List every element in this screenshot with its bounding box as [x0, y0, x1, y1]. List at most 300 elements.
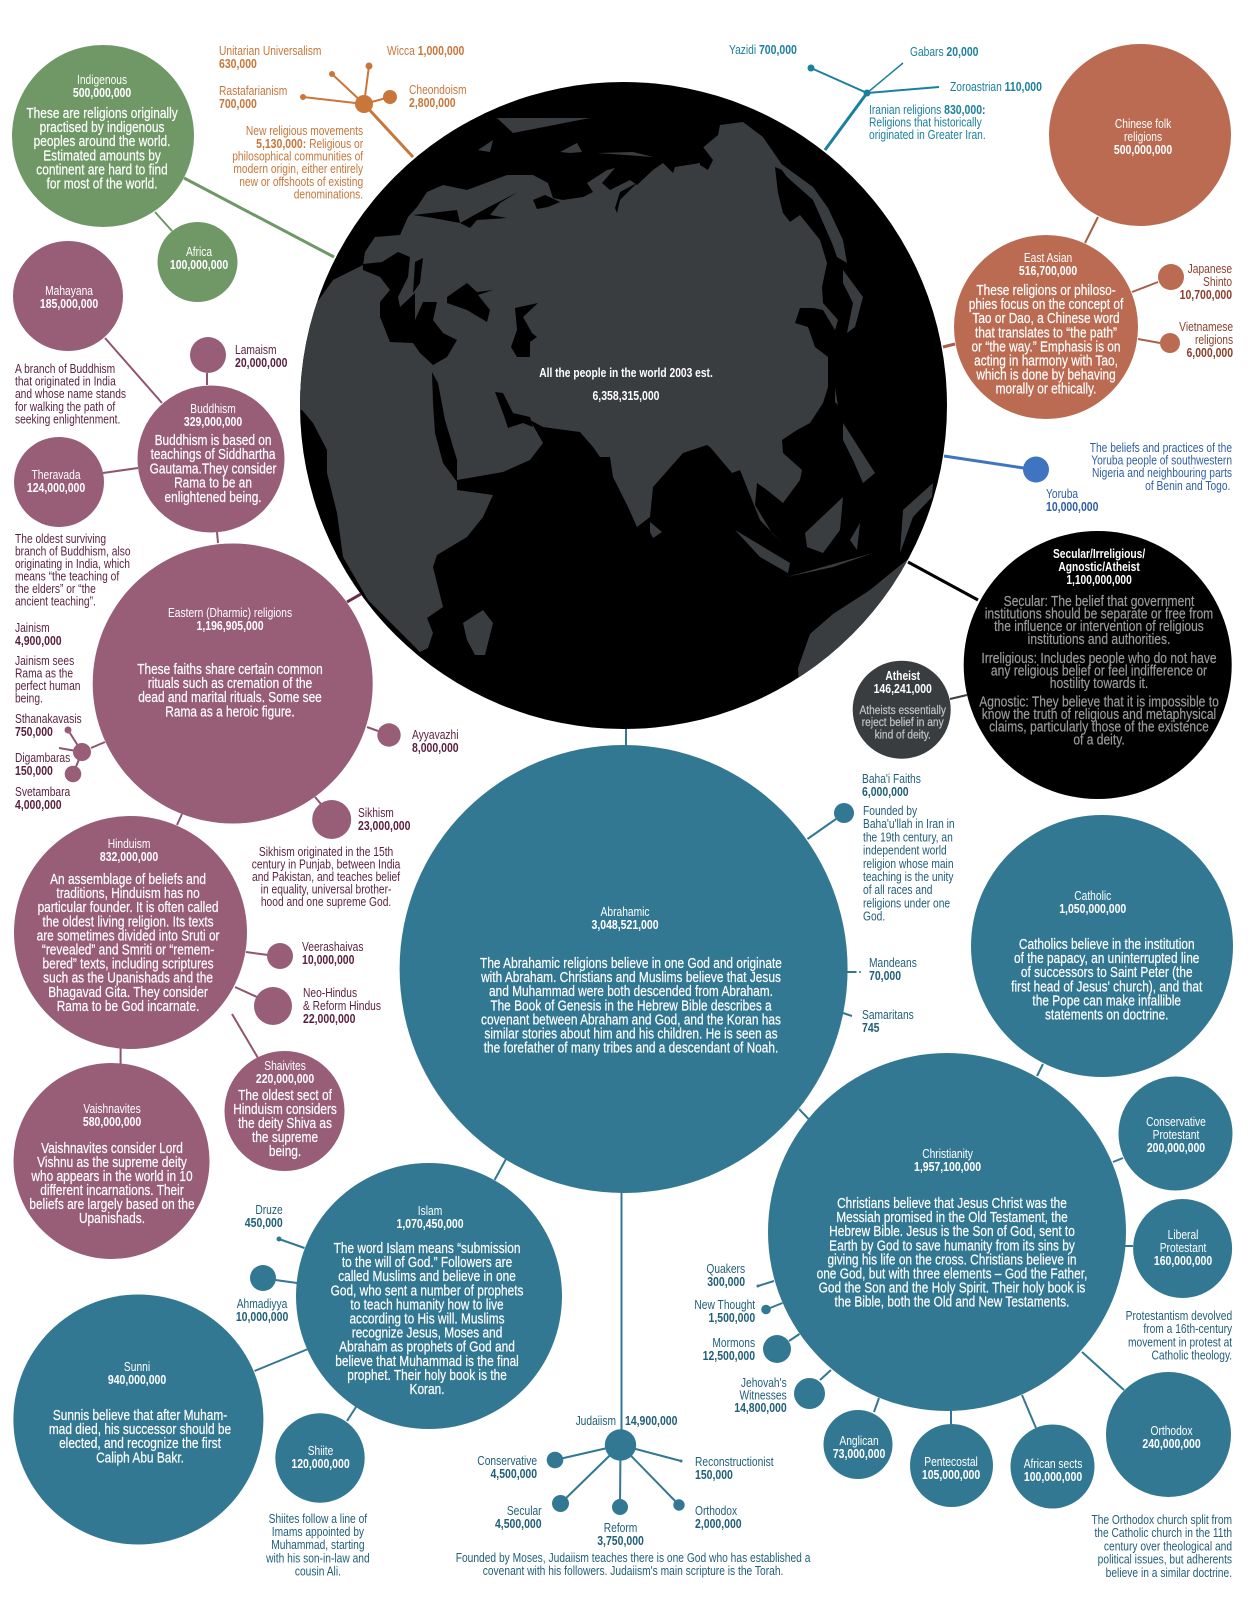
panel: Abrahamic: Abrahamic — [601, 906, 650, 919]
Liberal Protestant: Protestantism devolved — [1126, 1310, 1232, 1323]
panel: Islam — [13, 1163, 562, 1579]
Jainism cluster: 750,000 — [15, 725, 53, 739]
Liberal Protestant: 160,000,000 — [1154, 1254, 1213, 1268]
Liberal Protestant — [1126, 1199, 1233, 1363]
panel: Iranian religions: Religions that historically — [869, 117, 982, 130]
Japanese Shinto: Japanese — [1188, 263, 1232, 276]
Mormons: Mormons — [712, 1337, 755, 1350]
Druze — [245, 1204, 283, 1242]
Sikhism: century in Punjab, between India — [252, 859, 401, 872]
panel: new religious movements: denominations. — [294, 189, 363, 202]
Atheist circle: Atheists essentially — [860, 704, 946, 717]
Mandeans: Mandeans — [869, 957, 917, 970]
Quakers: Quakers — [706, 1263, 745, 1276]
Vaishnavites: Vaishnavites consider Lord — [41, 1140, 183, 1156]
panel: Indigenous: These are religions originally — [26, 105, 178, 121]
Orthodox: century over theological and — [1104, 1541, 1232, 1554]
Theravada: Theravada — [32, 469, 81, 482]
panel: Christianity: 1,957,100,000 — [914, 1160, 982, 1174]
panel: Secular/Irreligious/Agnostic/Atheist: Secular: The belief that government — [1004, 593, 1194, 609]
Vaishnavites — [14, 1063, 210, 1259]
panel: Yoruba: Yoruba people of southwestern — [1091, 455, 1232, 468]
panel: Eastern (Dharmic) religions: dead and marital rituals. Some see — [138, 689, 322, 705]
Theravada: branch of Buddhism, also — [15, 546, 131, 559]
Orthodox: Orthodox — [1150, 1425, 1193, 1438]
panel: Catholic: statements on doctrine. — [1045, 1006, 1168, 1023]
Quakers: 300,000 — [707, 1275, 746, 1289]
panel: Christianity: Christians believe that Jesus Christ was the — [837, 1195, 1067, 1211]
panel: Christianity: Christianity — [922, 1148, 973, 1161]
panel: Secular/Irreligious/Agnostic/Atheist: any religious belief or feel indifference or — [991, 662, 1208, 679]
Druze: 450,000 — [245, 1216, 283, 1230]
Liberal Protestant: Catholic theology. — [1151, 1350, 1232, 1363]
Ahmadiyya: 10,000,000 — [236, 1310, 289, 1324]
Jainism cluster: 150,000 — [15, 764, 53, 778]
Liberal Protestant: Liberal — [1168, 1229, 1198, 1242]
panel: Christianity: one God, but with three elements – God the Father, — [817, 1265, 1087, 1282]
Shiite: Shiites follow a line of — [269, 1513, 367, 1526]
panel: Hinduism: traditions, Hinduism has no — [56, 885, 200, 901]
Jainism cluster: Rama as the — [15, 668, 73, 681]
panel: East Asian: which is done by behaving — [975, 366, 1116, 383]
panel: Hinduism: particular founder. It is often called — [38, 899, 219, 915]
panel: Secular/Irreligious/Agnostic/Atheist — [853, 531, 1232, 799]
Japanese Shinto — [1158, 263, 1233, 302]
panel: Buddhism: Buddhism is based on — [155, 432, 272, 448]
Neo-Hindus: & Reform Hindus — [303, 1000, 381, 1013]
panel: Eastern (Dharmic) religions: Eastern (Dharmic) religions — [168, 607, 292, 620]
panel: Hinduism: An assemblage of beliefs and — [50, 871, 206, 887]
panel: new religious movements: 700,000 — [219, 97, 257, 111]
panel: Judaism: 2,000,000 — [695, 1517, 742, 1531]
Theravada: 124,000,000 — [27, 481, 86, 495]
panel: new religious movements: Rastafarianism — [219, 85, 287, 98]
panel: Abrahamic: The Abrahamic religions believe in one God and originate — [480, 955, 782, 971]
Baha'i Faiths: Baha'u'llah in Iran in — [863, 818, 955, 831]
panel: Buddhism: 329,000,000 — [184, 415, 243, 429]
panel: Christianity — [694, 1053, 1233, 1580]
panel: Hinduism: Bhagavad Gita. They consider — [48, 984, 208, 1000]
panel: Yoruba: 10,000,000 — [1046, 500, 1099, 514]
Jainism cluster: perfect human — [15, 680, 80, 693]
panel: East Asian: Tao or Dao, a Chinese word — [972, 310, 1120, 326]
panel: Abrahamic: similar stories about him and his children. He is seen as — [484, 1025, 778, 1042]
panel: Catholic: first head of Jesus' church), and that — [1011, 978, 1203, 995]
panel: Secular/Irreligious/Agnostic/Atheist: of a deity. — [1073, 731, 1125, 748]
panel: new religious movements: 5,130,000: Religious or — [256, 137, 363, 151]
panel: Catholic: of successors to Saint Peter (the — [1021, 964, 1193, 980]
New Thought: New Thought — [694, 1299, 755, 1312]
panel: Abrahamic: the forefather of many tribes and a descendant of Noah. — [484, 1039, 778, 1056]
panel: Buddhism — [13, 241, 288, 609]
Vaishnavites: beliefs are largely based on the — [29, 1196, 195, 1212]
Jainism cluster: Sthanakavasis — [15, 713, 82, 726]
panel: Eastern (Dharmic) religions: 1,196,905,000 — [197, 619, 264, 633]
New Thought: 1,500,000 — [709, 1311, 756, 1325]
panel: Iranian religions — [729, 43, 1042, 150]
panel: new religious movements: new or offshoots of existing — [239, 176, 363, 189]
Jainism cluster: Jainism — [15, 622, 50, 635]
Veerashaivas — [267, 941, 364, 969]
Pentecostal — [910, 1424, 993, 1507]
panel: Eastern (Dharmic) religions: rituals such as cremation of the — [148, 675, 312, 691]
Vaishnavites: Upanishads. — [79, 1210, 145, 1226]
New Thought — [694, 1299, 771, 1325]
panel: Judaism: Founded by Moses, Judaiism teaches there is one God who has established a — [456, 1552, 810, 1565]
panel: Judaism — [456, 1190, 811, 1578]
panel: Abrahamic: covenant between Abraham and God, and the Koran has — [481, 1011, 781, 1028]
panel: Islam: to teach humanity how to live — [350, 1296, 504, 1313]
panel: Eastern (Dharmic) religions: These faiths share certain common — [137, 661, 323, 677]
Shaivites: 220,000,000 — [256, 1072, 315, 1086]
Africa circle: 100,000,000 — [170, 258, 229, 272]
Atheist circle: kind of deity. — [875, 729, 931, 742]
Chinese folk religions: religions — [1124, 131, 1162, 144]
Orthodox — [1091, 1372, 1232, 1580]
Shaivites: The oldest sect of — [238, 1087, 332, 1103]
Sikhism: hood and one supreme God. — [261, 896, 391, 909]
panel: Secular/Irreligious/Agnostic/Atheist: institutions should be separate or free from — [985, 605, 1213, 622]
Baha'i Faiths — [834, 773, 955, 924]
panel: Christianity: the Bible, both the Old and New Testaments. — [835, 1294, 1069, 1310]
panel: Hinduism: bered” texts, including scriptures — [43, 955, 214, 972]
panel: East Asian: These religions or philoso- — [976, 282, 1116, 298]
panel: East Asian: acting in harmony with Tao, — [974, 352, 1118, 369]
panel: Buddhism: enlightened being. — [164, 489, 262, 505]
panel: Hinduism: Hinduism — [108, 838, 150, 851]
Jainism cluster: being. — [15, 693, 43, 706]
panel: East Asian: phies focus on the concept of — [969, 296, 1124, 312]
Pentecostal: 105,000,000 — [922, 1468, 981, 1482]
Mahayana: seeking enlightenment. — [15, 414, 120, 427]
African sects: 100,000,000 — [1024, 1470, 1083, 1484]
panel: Iranian religions: Iranian religions 830,000: — [869, 103, 986, 117]
panel: Hinduism — [14, 816, 381, 1259]
Liberal Protestant: Protestant — [1160, 1242, 1207, 1255]
Jehovah's Witnesses: Witnesses — [739, 1390, 787, 1403]
Shiite: Imams appointed by — [272, 1526, 364, 1539]
Mahayana: for walking the path of — [15, 401, 116, 414]
Mahayana: 185,000,000 — [40, 297, 99, 311]
Atheist circle: Atheist — [885, 670, 920, 683]
Baha'i Faiths: Baha'i Faiths — [862, 773, 921, 786]
Baha'i Faiths: Founded by — [863, 805, 917, 818]
panel: Judaism: 14,900,000 — [625, 1414, 678, 1428]
globe caption: All the people in the world 2003 est. — [539, 367, 713, 380]
Veerashaivas: Veerashaivas — [302, 941, 363, 954]
panel: Islam: according to His will. Muslims — [349, 1310, 505, 1327]
Theravada: ancient teaching”. — [15, 596, 96, 609]
Shaivites — [224, 1051, 344, 1171]
panel: Indigenous: continent are hard to find — [36, 161, 168, 178]
Orthodox: political issues, but adherents — [1098, 1554, 1232, 1567]
Jainism cluster: 4,900,000 — [15, 634, 62, 648]
panel: Catholic: 1,050,000,000 — [1059, 902, 1127, 916]
Chinese folk religions: Chinese folk — [1115, 118, 1171, 131]
panel: Buddhism: teachings of Siddhartha — [151, 446, 276, 462]
panel: Islam: prophet. Their holy book is the — [347, 1367, 507, 1383]
panel: Indigenous: Indigenous — [77, 74, 127, 87]
Shiite: with his son-in-law and — [265, 1552, 370, 1566]
panel: Hinduism: are sometimes divided into Sruti or — [37, 927, 220, 944]
panel: Iranian religions: Zoroastrian 110,000 — [950, 80, 1042, 94]
Shaivites: Hinduism considers — [233, 1101, 337, 1117]
Baha'i Faiths: religions under one — [863, 898, 950, 911]
Ayyavazhi: Ayyavazhi — [412, 729, 459, 742]
panel: East Asian: morally or ethically. — [996, 381, 1096, 397]
panel: Secular/Irreligious/Agnostic/Atheist: know the truth of religious and metaphysical — [982, 706, 1216, 722]
Vaishnavites: Vishnu as the supreme deity — [37, 1154, 187, 1170]
Conservative Protestant: Protestant — [1153, 1129, 1200, 1142]
panel: Iranian religions: Yazidi 700,000 — [729, 43, 797, 57]
panel: East Asian: 516,700,000 — [1019, 264, 1078, 278]
panel: Christianity: God the Son and the Holy Spirit. Their holy book is — [819, 1279, 1086, 1296]
globe: all the people in the world — [290, 82, 950, 729]
Atheist circle: 146,241,000 — [874, 682, 932, 696]
Lamaism — [190, 337, 288, 373]
Sunni: Sunni — [124, 1361, 150, 1374]
Sikhism: in equality, universal brother- — [261, 884, 392, 897]
panel: Secular/Irreligious/Agnostic/Atheist: Agnostic: They believe that it is impossible to — [979, 693, 1219, 710]
Orthodox: the Catholic church in the 11th — [1094, 1527, 1232, 1540]
Shiite: Shiite — [308, 1445, 333, 1458]
panel: Judaism: covenant with his followers. Judaiism's main scripture is the Torah. — [483, 1565, 783, 1578]
Vietnamese religions: 6,000,000 — [1186, 346, 1234, 360]
panel: Islam: Abraham as prophets of God and — [339, 1339, 515, 1355]
panel: Yoruba: Nigeria and neighbouring parts — [1092, 467, 1232, 480]
panel: Indigenous — [12, 45, 334, 302]
Vietnamese religions: religions — [1195, 334, 1233, 347]
panel: new religious movements: 630,000 — [219, 57, 257, 71]
panel: Judaism: 4,500,000 — [490, 1467, 538, 1481]
panel: Eastern (Dharmic) religions: Rama as a heroic figure. — [165, 703, 295, 720]
Quakers — [706, 1263, 760, 1289]
Shiite: cousin Ali. — [295, 1566, 341, 1579]
panel: Yoruba: of Benin and Togo. — [1145, 480, 1230, 493]
Theravada — [14, 437, 131, 609]
panel: Islam: recognize Jesus, Moses and — [352, 1324, 502, 1341]
Orthodox: 240,000,000 — [1142, 1437, 1201, 1451]
panel: Catholic: the Pope can make infallible — [1032, 992, 1181, 1009]
panel: Judaism: Reconstructionist — [695, 1456, 774, 1469]
Baha'i Faiths: the 19th century, an — [863, 832, 953, 845]
panel: Christianity: Messiah promised in the Old Testament, the — [836, 1209, 1068, 1225]
Jainism cluster: Svetambara — [15, 786, 70, 799]
Shaivites: the deity Shiva as — [238, 1115, 332, 1131]
Mahayana: and whose name stands — [15, 388, 126, 401]
Neo-Hindus: 22,000,000 — [303, 1012, 356, 1026]
Mormons — [703, 1335, 791, 1363]
panel: new religious movements: 2,800,000 — [409, 96, 456, 110]
panel: East Asian — [943, 44, 1234, 419]
panel: Abrahamic — [400, 729, 955, 1193]
panel: Judaism: Judaiism — [576, 1415, 616, 1428]
Sunni: elected, and recognize the first — [59, 1435, 221, 1451]
panel: Buddhism: Gautama.They consider — [150, 460, 277, 477]
Theravada: means “the teaching of — [15, 571, 120, 584]
Atheist circle — [853, 661, 951, 759]
Anglican — [824, 1410, 892, 1479]
Neo-Hindus: Neo-Hindus — [303, 987, 357, 1000]
globe caption: 6,358,315,000 — [592, 389, 660, 403]
Shiite: Muhammad, starting — [271, 1539, 365, 1552]
Mahayana: that originated in India — [15, 376, 116, 389]
Baha'i Faiths: independent world — [863, 845, 947, 858]
panel: East Asian: or “the way.” Emphasis is on — [972, 338, 1121, 355]
panel: Secular/Irreligious/Agnostic/Atheist: hostility towards it. — [1050, 675, 1148, 691]
panel: Abrahamic: The Book of Genesis in the Hebrew Bible describes a — [490, 997, 772, 1014]
panel: Islam: called Muslims and believe in one — [338, 1268, 516, 1284]
panel: Yoruba: Yoruba — [1046, 488, 1078, 501]
panel: Catholic — [971, 815, 1233, 1077]
African sects — [1010, 1424, 1094, 1508]
panel: Islam: The word Islam means “submission — [334, 1240, 520, 1256]
panel: new religious movements: Unitarian Universalism — [219, 45, 321, 58]
panel: East Asian: East Asian — [1024, 252, 1072, 265]
Veerashaivas: 10,000,000 — [302, 953, 355, 967]
Ayyavazhi — [377, 723, 459, 755]
panel: Islam: to the will of God.” Followers are — [342, 1254, 512, 1270]
Baha'i Faiths: of all races and — [863, 884, 932, 897]
Orthodox: The Orthodox church split from — [1091, 1514, 1232, 1527]
Baha'i Faiths: teaching is the unity — [863, 871, 954, 884]
Sunni: mad died, his successor should be — [49, 1421, 231, 1437]
Lamaism: 20,000,000 — [235, 356, 288, 370]
Conservative Protestant: 200,000,000 — [1147, 1141, 1206, 1155]
Orthodox: believe in a similar doctrine. — [1106, 1567, 1232, 1580]
Mahayana: A branch of Buddhism — [15, 363, 115, 376]
Vaishnavites: who appears in the world in 10 — [31, 1168, 193, 1184]
Neo-Hindus — [254, 987, 381, 1026]
Sunni: 940,000,000 — [108, 1373, 167, 1387]
panel: new religious movements: philosophical communities of — [232, 151, 364, 164]
panel: Indigenous: 500,000,000 — [73, 86, 132, 100]
panel: Iranian religions: Gabars 20,000 — [910, 45, 979, 59]
Atheist circle: reject belief in any — [862, 716, 944, 729]
panel: Hinduism: such as the Upanishads and the — [43, 970, 213, 986]
Druze: Druze — [255, 1204, 283, 1217]
Sunni — [13, 1294, 263, 1544]
panel: Abrahamic: 3,048,521,000 — [592, 918, 659, 932]
African sects: African sects — [1024, 1458, 1082, 1471]
panel: Secular/Irreligious/Agnostic/Atheist: Secular/Irreligious/ — [1053, 548, 1145, 561]
Anglican: Anglican — [839, 1435, 879, 1448]
Mandeans: 70,000 — [869, 969, 902, 983]
panel: Judaism: Orthodox — [695, 1505, 737, 1518]
Jainism cluster — [15, 622, 91, 812]
Jainism cluster: 4,000,000 — [15, 798, 62, 812]
panel: Secular/Irreligious/Agnostic/Atheist: Agnostic/Atheist — [1058, 561, 1140, 574]
panel: Islam: believe that Muhammad is the final — [335, 1353, 519, 1369]
Conservative Protestant: Conservative — [1146, 1116, 1206, 1129]
Ayyavazhi: 8,000,000 — [412, 741, 459, 755]
panel: Secular/Irreligious/Agnostic/Atheist: Irreligious: Includes people who do not have — [981, 650, 1217, 666]
panel: Secular/Irreligious/Agnostic/Atheist: claims, particularly those of the existence — [989, 719, 1209, 735]
Africa circle — [158, 222, 238, 302]
Conservative Protestant — [1118, 1076, 1232, 1190]
panel: Judaism: Secular — [507, 1505, 542, 1518]
Baha'i Faiths: 6,000,000 — [862, 785, 909, 799]
Japanese Shinto: Shinto — [1203, 276, 1232, 289]
panel: Judaism: Reform — [604, 1522, 637, 1535]
Vaishnavites: Vaishnavites — [83, 1103, 141, 1116]
Mahayana: Mahayana — [45, 285, 93, 298]
Ahmadiyya: Ahmadiyya — [237, 1298, 287, 1311]
Sikhism: Sikhism originated in the 15th — [259, 846, 393, 859]
Sunni: Caliph Abu Bakr. — [96, 1449, 184, 1466]
panel: Catholic: Catholic — [1074, 890, 1111, 903]
panel: Judaism: 4,500,000 — [495, 1517, 542, 1531]
Sikhism — [252, 800, 411, 909]
panel: Hinduism: 832,000,000 — [100, 850, 159, 864]
Jehovah's Witnesses: 14,800,000 — [734, 1401, 787, 1415]
Theravada: The oldest surviving — [15, 533, 106, 546]
panel: Indigenous: practised by indigenous — [40, 119, 165, 135]
panel: Hinduism: Rama to be God incarnate. — [57, 998, 199, 1014]
panel: Hinduism: “revealed” and Smriti or “remem- — [42, 941, 214, 958]
Jehovah's Witnesses — [734, 1377, 825, 1415]
Chinese folk religions: 500,000,000 — [1114, 143, 1173, 157]
panel: new religious movements: Wicca 1,000,000 — [387, 44, 465, 58]
panel: Catholic: of the papacy, an uninterrupted line — [1014, 950, 1199, 966]
panel: Indigenous: Estimated amounts by — [43, 147, 161, 164]
Samaritans: 745 — [862, 1021, 880, 1035]
Jehovah's Witnesses: Jehovah's — [741, 1377, 787, 1390]
Chinese folk religions — [1049, 44, 1231, 226]
Sikhism: 23,000,000 — [358, 819, 411, 833]
panel: Abrahamic: and Muhammad were both descended from Abraham. — [489, 983, 773, 999]
Ahmadiyya — [236, 1265, 289, 1324]
panel: Islam: Islam — [418, 1205, 442, 1218]
panel: Eastern (Dharmic) religions — [15, 544, 459, 909]
Sunni: Sunnis believe that after Muham- — [53, 1407, 227, 1423]
Sikhism: Sikhism — [358, 807, 394, 820]
Mormons: 12,500,000 — [703, 1349, 756, 1363]
panel: Secular/Irreligious/Agnostic/Atheist: institutions and authorities. — [1028, 631, 1170, 647]
Vietnamese religions: Vietnamese — [1179, 321, 1233, 334]
panel: Iranian religions: originated in Greater Iran. — [869, 129, 986, 142]
panel: Indigenous: peoples around the world. — [34, 133, 170, 149]
Vaishnavites: 580,000,000 — [83, 1115, 142, 1129]
panel: Islam: God, who sent a number of prophets — [331, 1282, 524, 1299]
Liberal Protestant: movement in protest at — [1128, 1337, 1233, 1350]
Vietnamese religions — [1160, 321, 1234, 360]
panel: Judaism: Conservative — [477, 1455, 537, 1468]
Pentecostal: Pentecostal — [924, 1456, 978, 1469]
panel: Islam: 1,070,450,000 — [397, 1217, 464, 1231]
panel: Judaism: 3,750,000 — [597, 1534, 644, 1548]
panel: Judaism: 150,000 — [695, 1468, 733, 1482]
Shaivites: the supreme — [252, 1129, 318, 1145]
panel: Islam: Koran. — [410, 1381, 445, 1397]
Vaishnavites: different incarnations. Their — [40, 1182, 184, 1198]
panel: Secular/Irreligious/Agnostic/Atheist: 1,100,000,000 — [1066, 574, 1132, 587]
Theravada: the elders” or “the — [15, 583, 96, 596]
Mandeans — [859, 957, 917, 983]
Shiite — [265, 1413, 370, 1579]
Jainism cluster: Digambaras — [15, 752, 70, 765]
Sikhism: and Pakistan, and teaches belief — [252, 871, 401, 884]
panel: Abrahamic: with Abraham. Christians and Muslims believe that Jesus — [480, 969, 781, 985]
panel: new religious movements — [219, 44, 467, 202]
panel: new religious movements: Cheondoism — [409, 84, 467, 97]
Jainism cluster: Jainism sees — [15, 655, 74, 668]
panel: Buddhism: Rama to be an — [174, 474, 252, 491]
panel: East Asian: that translates to “the path” — [975, 324, 1117, 341]
panel: Buddhism: Buddhism — [190, 403, 236, 416]
Lamaism: Lamaism — [235, 344, 277, 357]
Samaritans: Samaritans — [862, 1009, 914, 1022]
